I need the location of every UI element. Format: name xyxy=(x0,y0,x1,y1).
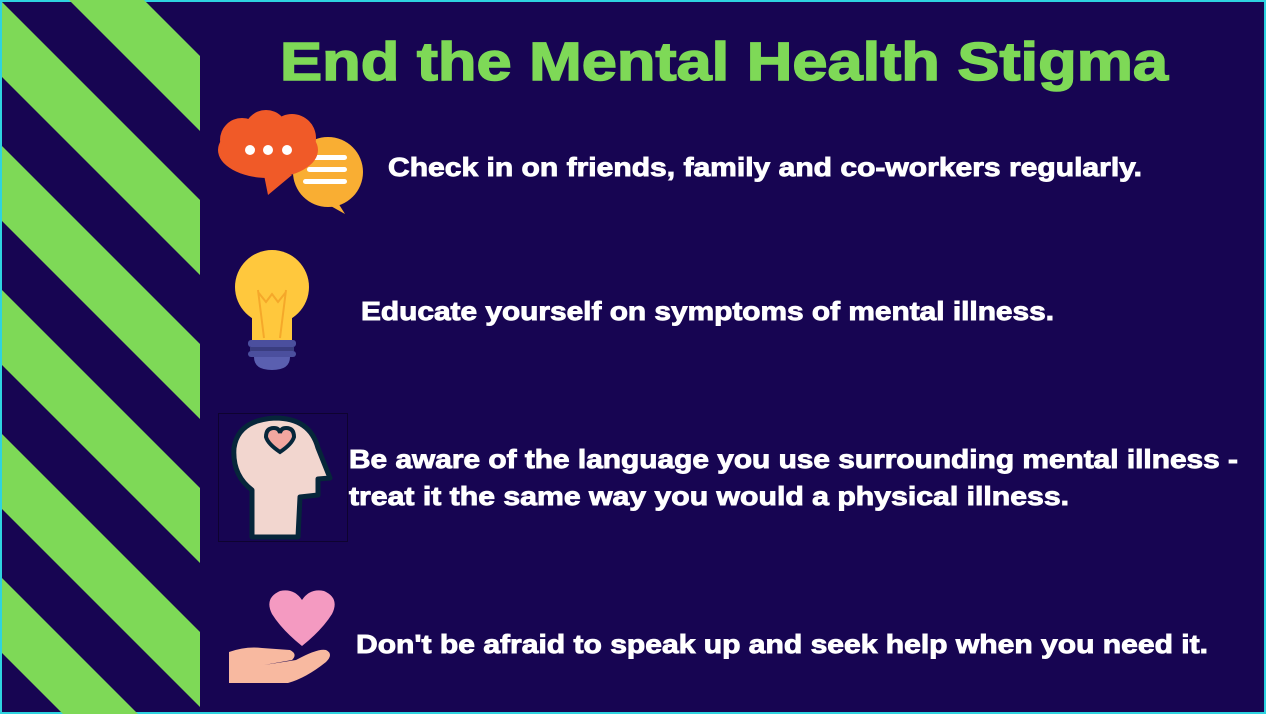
icon: head with heart xyxy=(218,414,348,542)
text: be aware: treat it the same way you would a physical illness. xyxy=(349,481,1069,511)
title: End the Mental Health Stigma xyxy=(280,32,1169,92)
text: be aware: Be aware of the language you use surrounding mental illness - xyxy=(349,444,1238,474)
text: speak up: Don't be afraid to speak up and seek help when you need it. xyxy=(356,629,1208,659)
text: educate: Educate yourself on symptoms of mental illness. xyxy=(361,296,1054,326)
icon: chat bubbles xyxy=(218,110,363,214)
decorative stripes panel xyxy=(2,0,200,714)
text: be aware xyxy=(349,444,1238,511)
icon: hand with heart xyxy=(229,590,335,683)
icon: light bulb xyxy=(235,250,309,370)
text: check in: Check in on friends, family and co-workers regularly. xyxy=(388,152,1142,182)
